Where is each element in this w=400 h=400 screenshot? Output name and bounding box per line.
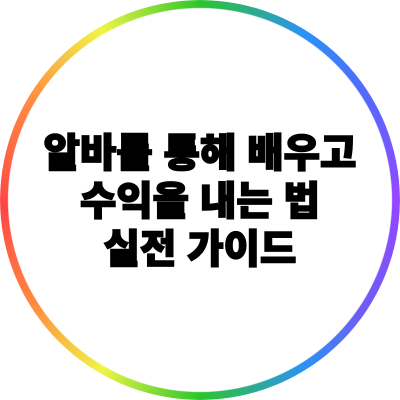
title: 알바를 통해 배우고 [44,132,356,176]
title: 실전 가이드 [104,228,296,272]
title: 수익을 내는 법 [80,180,320,224]
title [44,132,356,272]
